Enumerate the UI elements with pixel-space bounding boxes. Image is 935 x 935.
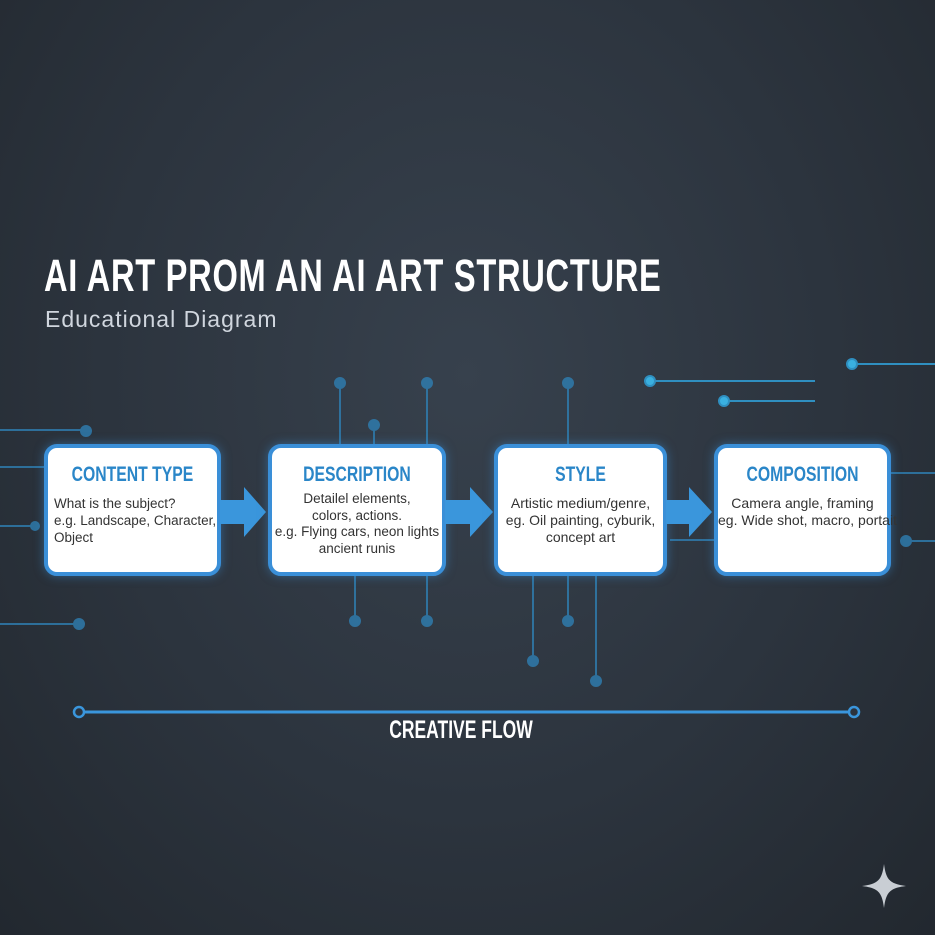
arrow 1 — [221, 487, 266, 537]
box: content type: CONTENT TYPE — [72, 463, 193, 486]
subtitle: Educational Diagram — [45, 306, 278, 332]
box: description: Detailel elements, — [303, 491, 411, 506]
box: composition: eg. Wide shot, macro, portait — [718, 512, 897, 528]
box: style: STYLE — [555, 463, 606, 486]
box: content type: What is the subject? — [54, 496, 176, 511]
box: content type — [44, 444, 221, 576]
box: style: eg. Oil painting, cyburik, — [506, 512, 655, 528]
box: composition: Camera angle, framing — [731, 495, 874, 511]
box: style — [494, 444, 667, 576]
box: description — [268, 444, 446, 576]
box: style: concept art — [546, 529, 615, 545]
box: description: colors, actions. — [312, 508, 402, 522]
title: AI ART PROM AN AI ART STRUCTURE — [44, 250, 662, 301]
arrow 2 — [446, 487, 493, 537]
timeline — [72, 706, 860, 718]
box: content type: e.g. Landscape, Character, — [54, 513, 216, 528]
box: composition: COMPOSITION — [746, 463, 859, 486]
box: content type: Object — [54, 530, 93, 545]
box: description: ancient runis — [319, 540, 395, 556]
arrow 3 — [667, 487, 712, 537]
label: creative flow: CREATIVE FLOW — [389, 716, 533, 744]
box: description: e.g. Flying cars, neon lights — [275, 524, 439, 539]
box: style: Artistic medium/genre, — [511, 495, 650, 511]
box: description: DESCRIPTION — [303, 463, 411, 486]
box: composition — [714, 444, 891, 576]
icon: sparkle — [862, 864, 906, 908]
